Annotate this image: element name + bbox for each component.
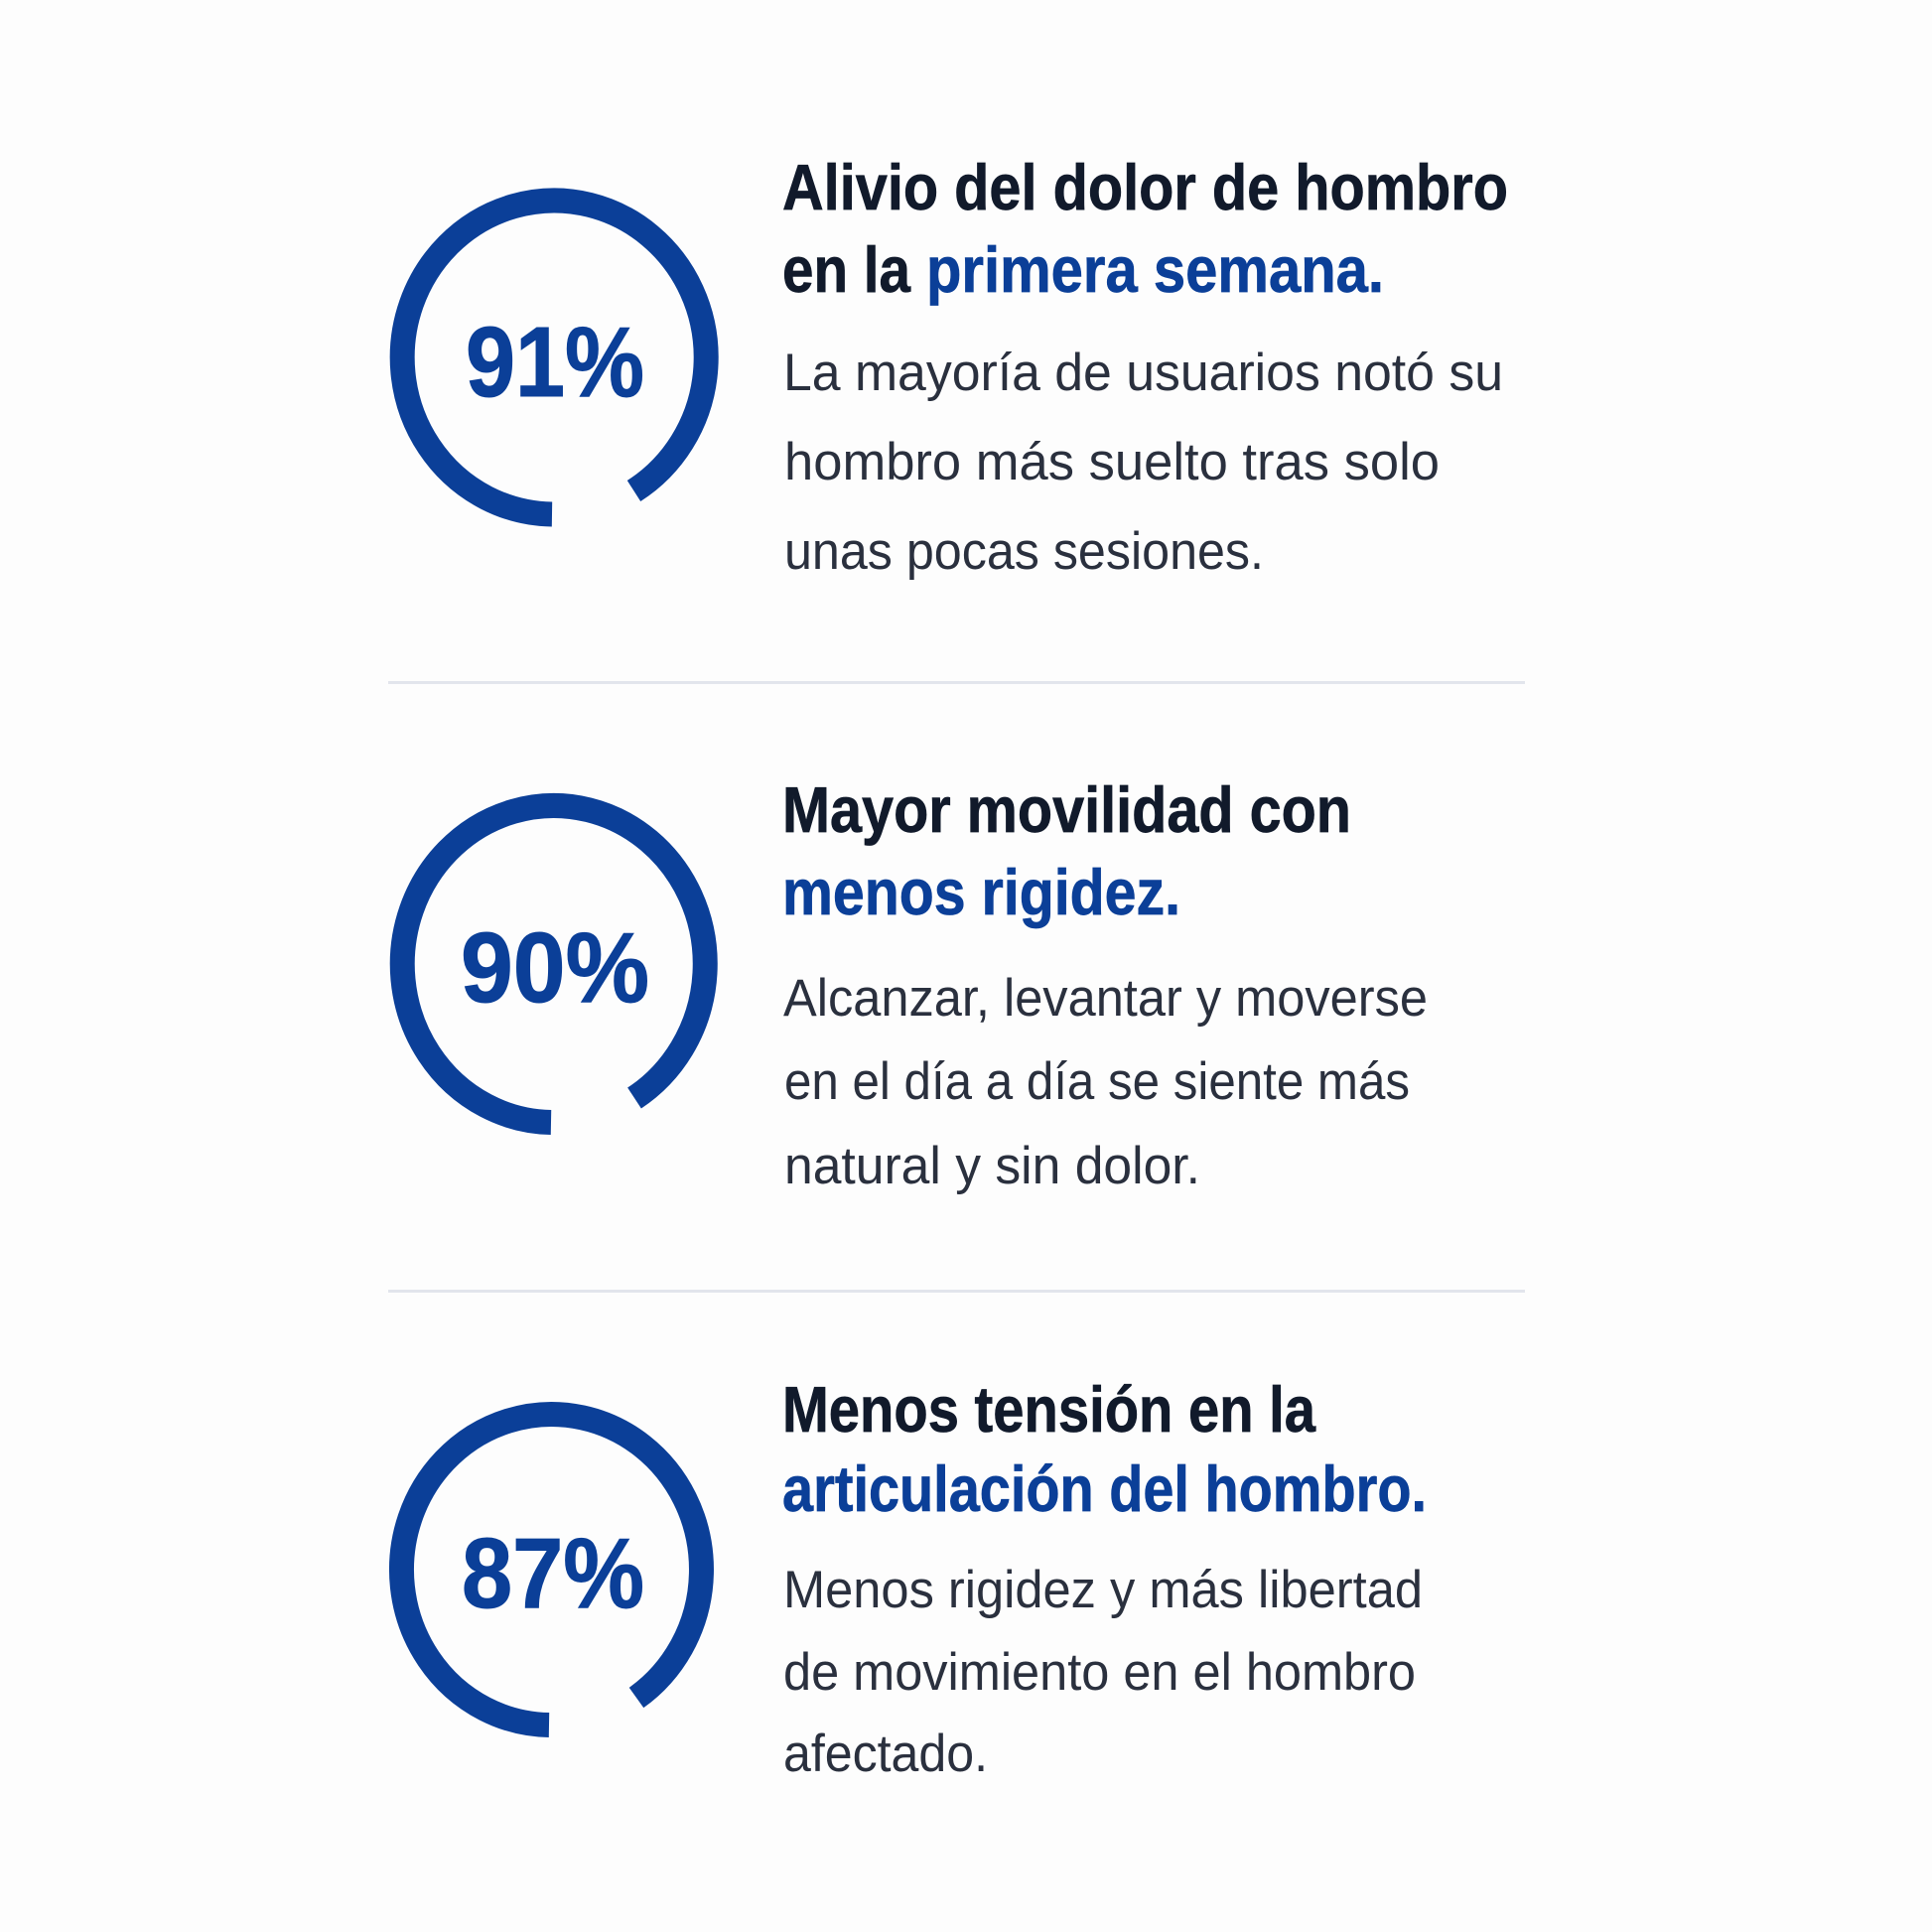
heading: first stat: en la: [782, 233, 911, 306]
heading: third stat: Menos tensión en la: [782, 1373, 1316, 1446]
heading: first stat: [782, 151, 1508, 306]
body text: first stat: hombro más suelto tras solo: [784, 433, 1440, 491]
heading: second stat: menos rigidez.: [782, 856, 1180, 928]
heading: second stat: Mayor movilidad con: [782, 773, 1351, 846]
heading: second stat: [782, 773, 1351, 928]
heading: first stat: Alivio del dolor de hombro: [782, 151, 1508, 223]
body text: second stat: [783, 969, 1428, 1195]
body text: third stat: de movimiento en el hombro: [783, 1643, 1416, 1702]
body text: first stat: unas pocas sesiones.: [784, 522, 1264, 581]
body text: second stat: natural y sin dolor.: [784, 1137, 1200, 1195]
number: 87%: 87%: [462, 1518, 644, 1629]
panel: stat 87%: [401, 1373, 1427, 1783]
panel: stat 90%: [402, 773, 1428, 1195]
heading: third stat: articulación del hombro.: [782, 1452, 1427, 1525]
body text: third stat: afectado.: [783, 1725, 988, 1783]
body text: second stat: Alcanzar, levantar y moverse: [783, 969, 1428, 1028]
ring: 87%: [401, 1415, 701, 1725]
ring: 90%: [402, 806, 705, 1122]
body text: third stat: [783, 1561, 1423, 1783]
body text: third stat: Menos rigidez y más libertad: [783, 1561, 1423, 1619]
number: 90%: 90%: [461, 912, 649, 1024]
body text: first stat: [783, 344, 1503, 581]
heading: third stat: [782, 1373, 1427, 1525]
body text: first stat: La mayoría de usuarios notó su: [783, 344, 1503, 402]
heading: first stat: primera semana.: [926, 233, 1384, 306]
panel: stat 91%: [402, 151, 1508, 581]
ring: 91%: [402, 201, 706, 514]
body text: second stat: en el día a día se siente más: [784, 1052, 1410, 1111]
number: 91%: 91%: [466, 307, 644, 418]
